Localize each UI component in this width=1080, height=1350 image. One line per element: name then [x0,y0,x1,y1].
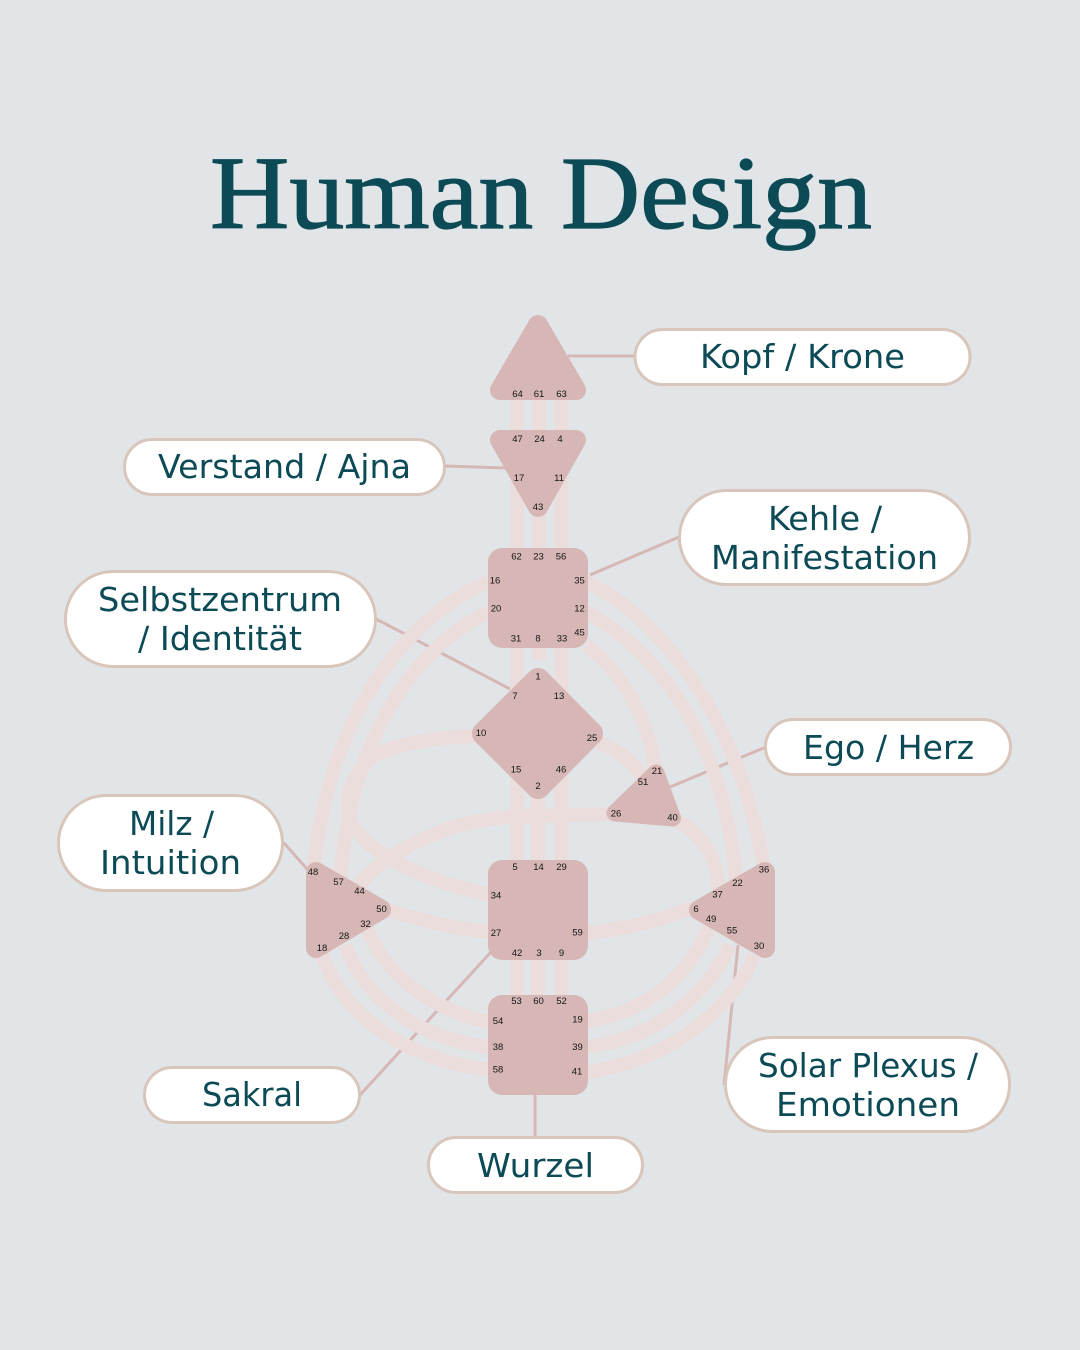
gate numbers: 33 [557,634,567,644]
gate numbers: 12 [574,604,585,614]
center: solar plexus [699,872,765,948]
gate numbers: 57 [333,877,344,888]
gate numbers: 62 [511,552,522,562]
gate numbers: 22 [732,878,743,889]
label: Ego / Herz: Ego / Herz [803,728,974,767]
gate numbers: 50 [376,904,387,915]
label: Kehle / Manifestation: Kehle / [768,499,883,538]
gate numbers: 48 [308,867,318,878]
label: Selbstzentrum / Identität: Selbstzentrum [98,580,342,619]
gate numbers: 27 [491,928,501,939]
gate numbers: 11 [554,473,564,484]
gate numbers: 46 [556,764,566,776]
label: Sakral [144,1068,360,1122]
gate numbers: 6 [693,904,699,915]
gate numbers: 26 [611,808,621,820]
center: root [488,995,588,1095]
center: self / G [484,680,591,787]
center: sacral [488,860,588,960]
label: Solar Plexus / Emotionen [726,1038,1010,1132]
label: Selbstzentrum / Identität [66,572,376,666]
gate numbers: 5 [512,862,518,873]
gate numbers: 16 [490,576,500,586]
gate numbers: 18 [317,943,327,954]
gate numbers: 24 [534,434,545,445]
gate numbers: 35 [574,576,585,586]
label: Milz / Intuition: Milz / [129,804,215,843]
gate numbers: 30 [754,941,764,952]
gate numbers: 36 [759,864,769,876]
gate numbers: 7 [512,691,518,702]
gate numbers: 58 [493,1064,503,1076]
label: Solar Plexus / Emotionen: Emotionen [776,1085,960,1124]
gate numbers: 60 [533,996,544,1007]
label: Kopf / Krone: Kopf / Krone [700,337,905,376]
gate numbers: 51 [638,777,648,788]
gate numbers: 45 [574,628,585,638]
center: throat [488,548,588,648]
gate numbers: 53 [511,996,522,1007]
gate numbers: 56 [556,552,566,562]
gate numbers: 19 [572,1014,583,1026]
label: Solar Plexus / Emotionen: Solar Plexus / [758,1046,979,1085]
gate numbers: 41 [572,1066,582,1078]
label: Verstand / Ajna [124,440,444,494]
gate numbers [308,389,769,1078]
gate numbers: 37 [712,890,723,900]
label: Verstand / Ajna: Verstand / Ajna [158,447,411,486]
gate numbers: 23 [533,552,544,562]
title: Human Design [210,136,872,251]
center: ego / heart [615,773,672,818]
gate numbers: 17 [514,473,524,484]
gate numbers: 38 [493,1042,503,1053]
gate numbers: 4 [557,434,563,445]
gate numbers: 42 [512,948,522,959]
gate numbers: 14 [533,862,544,873]
label: Milz / Intuition [58,796,282,890]
gate numbers: 13 [554,691,564,702]
gate numbers: 63 [556,389,567,400]
gate numbers: 8 [535,634,541,644]
gate numbers: 64 [512,389,523,400]
channels network [314,395,764,1072]
gate numbers: 32 [360,919,371,930]
gate numbers: 49 [706,914,716,925]
label: Wurzel: Wurzel [477,1146,594,1185]
gate numbers: 3 [536,948,542,959]
gate numbers: 47 [512,434,523,445]
gate numbers: 21 [652,766,662,777]
gate numbers: 20 [491,604,501,614]
gate numbers: 25 [587,733,597,744]
gate numbers: 1 [535,672,541,682]
label: Kehle / Manifestation: Manifestation [711,538,938,577]
gate numbers: 61 [534,389,544,400]
leader lines connecting labels to centers [283,356,766,1138]
gate numbers: 29 [556,862,567,873]
label: Sakral: Sakral [202,1075,302,1114]
gate numbers: 31 [511,634,521,644]
center: spleen [316,872,381,948]
gate numbers: 10 [476,728,486,739]
gate numbers: 39 [572,1042,583,1053]
gate numbers: 15 [511,764,521,776]
label: Wurzel [428,1138,642,1192]
label: Kehle / Manifestation [680,490,970,584]
label: Selbstzentrum / Identität: / Identität [138,619,302,658]
gate numbers: 44 [354,886,365,897]
gate numbers: 59 [572,928,583,938]
label: Ego / Herz [766,720,1010,774]
gate numbers: 34 [491,890,501,902]
gate numbers: 52 [556,996,567,1007]
gate numbers: 54 [493,1016,503,1027]
gate numbers: 28 [339,931,349,942]
gate numbers: 9 [559,948,564,959]
gate numbers: 43 [533,502,543,513]
label: Kopf / Krone [635,330,970,384]
gate numbers: 40 [667,812,678,824]
center: ajna [500,440,576,507]
gate numbers: 55 [727,926,737,936]
center: head [500,325,576,390]
gate numbers: 2 [535,781,541,792]
label: Milz / Intuition: Intuition [100,843,241,882]
